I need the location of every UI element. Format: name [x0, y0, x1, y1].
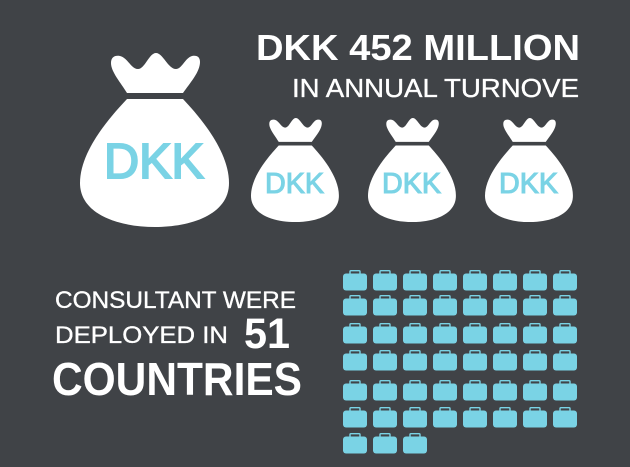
icon: small money bag 2: DKK	[382, 168, 442, 200]
icon: large money bag	[80, 53, 229, 227]
icon: large money bag: DKK	[104, 135, 204, 189]
icon: small money bag 1	[251, 118, 339, 222]
line one: CONSULTANT WERE	[55, 287, 296, 314]
headline amount: DKK 452 MILLION	[256, 27, 580, 68]
icon grid: 51 briefcases	[343, 271, 577, 454]
heading: turnover	[256, 27, 580, 103]
icon: small money bag 2	[368, 118, 456, 222]
subheading: IN ANNUAL TURNOVE	[292, 73, 579, 103]
line two: DEPLOYED IN	[55, 322, 228, 349]
text block: consultants deployed	[52, 287, 302, 405]
number 51: 51	[244, 310, 290, 358]
line three: COUNTRIES	[52, 353, 302, 405]
icon: small money bag 3: DKK	[499, 168, 559, 200]
icon: small money bag 3	[485, 118, 573, 222]
icon: small money bag 1: DKK	[265, 168, 325, 200]
